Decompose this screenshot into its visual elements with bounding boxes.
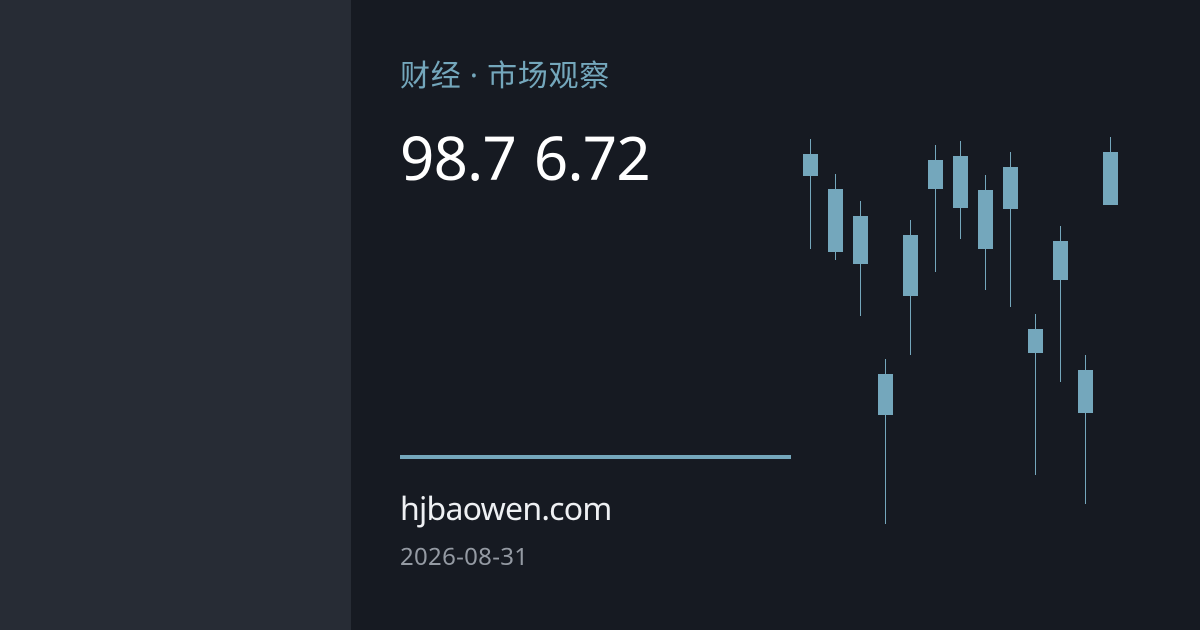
panel: left sidebar (0, 0, 351, 630)
date: 2026-08-31 (400, 540, 528, 573)
site domain: hjbaowen.com (400, 487, 612, 530)
accent rule (400, 455, 791, 459)
heading: category: 财经 · 市场观察 (400, 54, 610, 95)
headline number: 98.7 6.72 (400, 116, 650, 198)
